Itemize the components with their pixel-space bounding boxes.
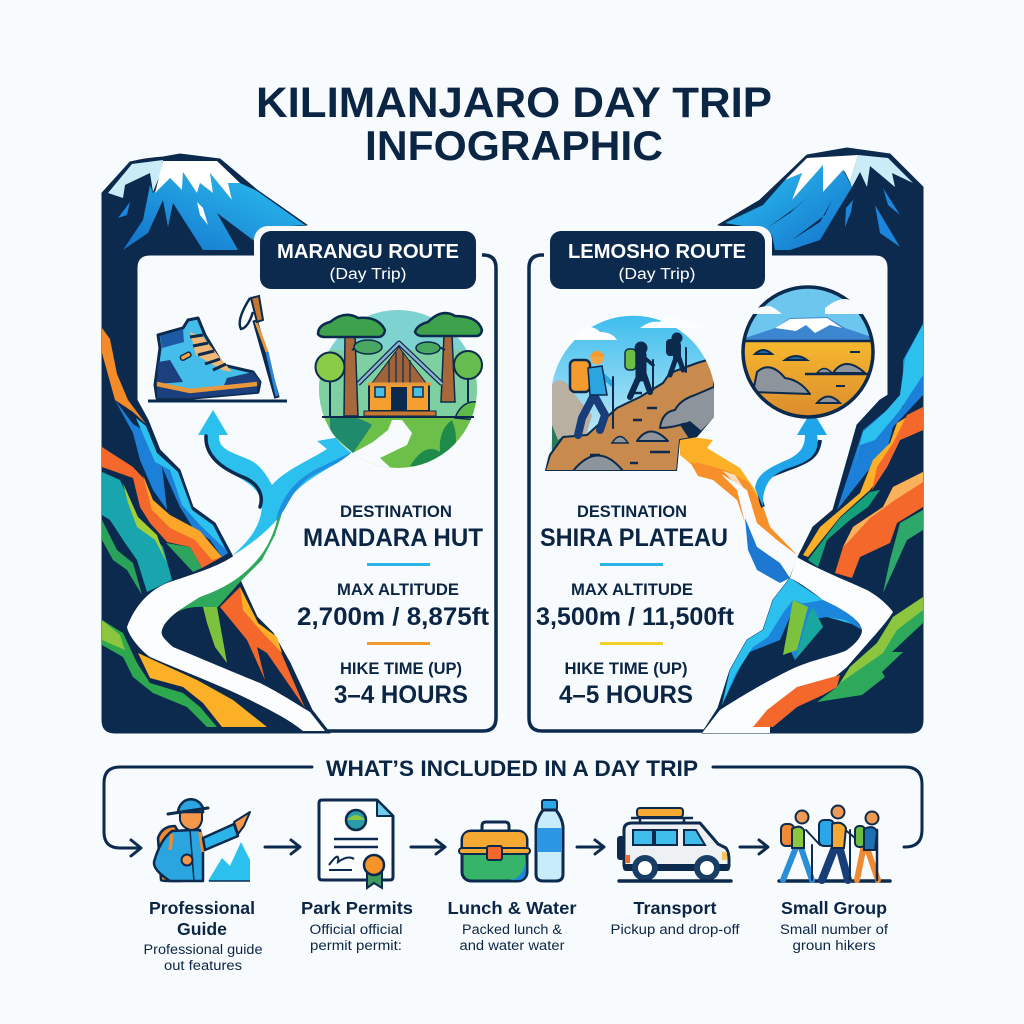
stats: MAX ALTITUDE <box>337 580 459 599</box>
icon: lunch box and water <box>459 800 563 881</box>
label: lunch and water <box>448 898 577 953</box>
label: professional guide: Professional <box>149 898 255 918</box>
label: lunch and water: Packed lunch & <box>462 922 562 937</box>
label: small group: groun hikers <box>792 938 876 953</box>
trail edge blue <box>745 518 790 583</box>
section connector frame <box>104 767 922 856</box>
arrow: to hikers <box>680 435 797 555</box>
label: transport: Pickup and drop-off <box>610 922 740 937</box>
label: professional guide: Professional guide <box>144 942 262 957</box>
stats: 2,700m / 8,875ft <box>297 603 490 631</box>
stats: 4–5 HOURS <box>559 681 693 709</box>
lower left mountain colours <box>722 578 862 705</box>
stats: DESTINATION <box>577 502 687 521</box>
icon: hikers <box>545 316 714 471</box>
label: transport: Transport <box>634 898 717 918</box>
label: small group: Small Group <box>781 898 887 918</box>
panel: Lemosho route <box>529 148 923 733</box>
foothill colour bands <box>163 513 305 708</box>
icon: park permit <box>319 800 393 888</box>
label: park permits: permit permit: <box>310 938 402 953</box>
stats: DESTINATION <box>340 502 452 521</box>
section: what's included <box>104 756 922 973</box>
title: KILIMANJARO DAY TRIP <box>256 79 772 127</box>
label: park permits <box>301 898 413 953</box>
icon: hut in forest <box>300 309 482 470</box>
dark mountain frame right <box>702 148 923 733</box>
icon: transport van <box>617 808 731 881</box>
label: professional guide <box>144 898 262 973</box>
panel outline <box>320 255 496 731</box>
stats: HIKE TIME (UP) <box>340 659 462 678</box>
label: lunch and water: and water water <box>460 938 565 953</box>
label: park permits: Official official <box>310 922 402 937</box>
stats: 3,500m / 11,500ft <box>536 603 735 631</box>
title <box>256 79 772 169</box>
route tab <box>544 226 772 292</box>
white trail <box>127 520 325 731</box>
stats <box>297 502 490 709</box>
route tab: (Day Trip) <box>618 266 696 283</box>
arrows between items <box>265 840 768 854</box>
label: small group <box>780 898 888 953</box>
panel: Marangu route <box>102 154 496 733</box>
label: transport <box>610 898 740 937</box>
mountain peak right <box>725 155 913 250</box>
section heading: WHAT’S INCLUDED IN A DAY TRIP <box>326 756 698 781</box>
route tab: (Day Trip) <box>330 266 406 283</box>
stats: HIKE TIME (UP) <box>564 659 688 678</box>
clouds <box>565 316 707 340</box>
stats <box>536 502 735 709</box>
right ridge colour bands <box>803 324 923 593</box>
stats: SHIRA PLATEAU <box>540 524 728 552</box>
stats: MAX ALTITUDE <box>571 580 693 599</box>
stats: 3–4 HOURS <box>334 681 468 709</box>
mountain peak left <box>108 160 305 250</box>
icon: professional guide <box>154 799 250 881</box>
label: small group: Small number of <box>780 922 888 937</box>
panel outline <box>529 255 715 731</box>
label: park permits: Park Permits <box>301 898 413 918</box>
label: professional guide: out features <box>164 958 242 973</box>
bottom-right colour bands <box>753 597 923 727</box>
label: lunch and water: Lunch & Water <box>448 898 577 918</box>
label: professional guide: Guide <box>177 919 227 939</box>
icon: boot and pole <box>148 296 287 401</box>
white trail <box>702 557 893 733</box>
icon: small group <box>779 806 890 881</box>
stats: MANDARA HUT <box>303 524 483 552</box>
route tab: LEMOSHO ROUTE <box>568 241 746 263</box>
route tab <box>254 226 482 292</box>
arrow: to plateau <box>755 410 827 507</box>
icon: Shira plateau <box>740 284 880 421</box>
arrow: route split <box>198 410 352 556</box>
route tab: MARANGU ROUTE <box>277 241 459 263</box>
title: INFOGRAPHIC <box>365 122 663 169</box>
dark mountain frame left <box>102 154 330 733</box>
left ridge colour bands <box>102 328 267 727</box>
